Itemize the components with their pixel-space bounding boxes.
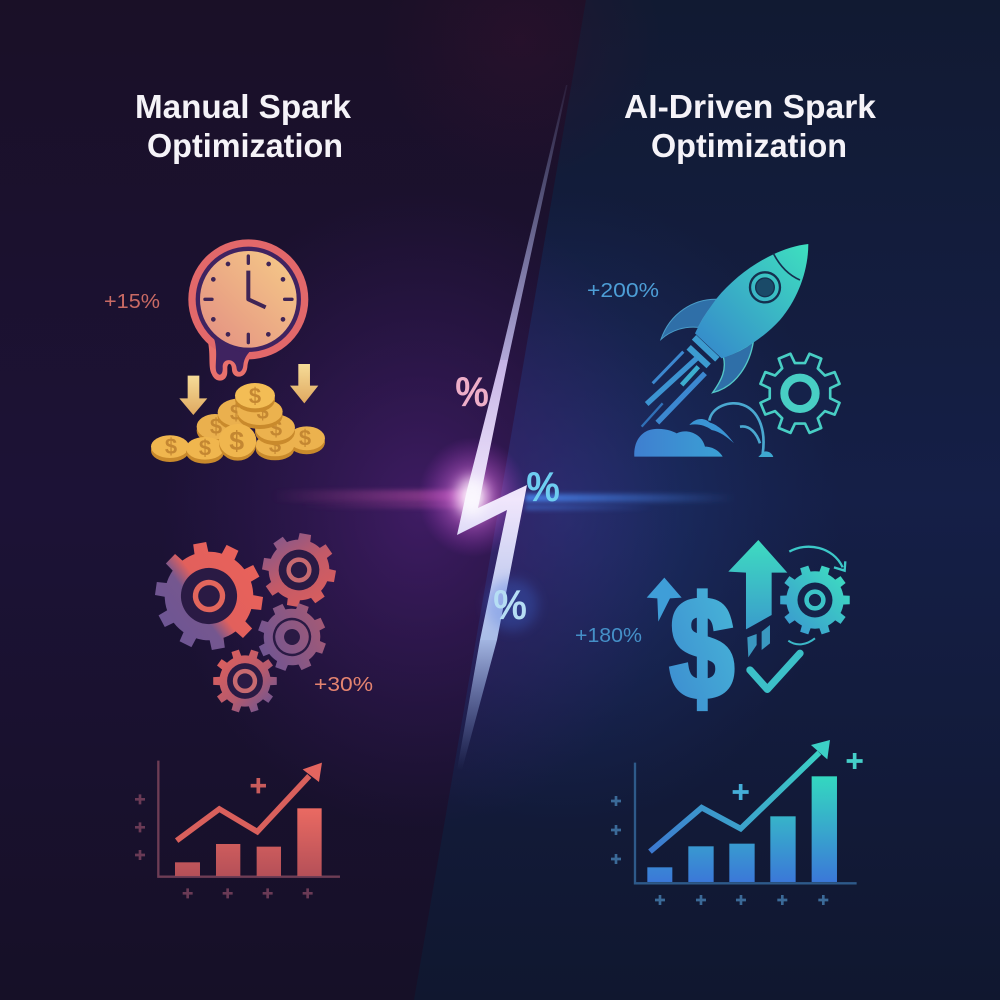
coin pile: $ [269, 433, 281, 458]
bars [175, 808, 322, 876]
cloud solid [634, 429, 723, 457]
right fin [713, 342, 753, 393]
clock ticks [205, 256, 292, 343]
coin pile: $ [165, 434, 177, 459]
coin pile: $ [249, 383, 261, 408]
cloud foot [758, 451, 773, 457]
coin pile: $ [257, 399, 269, 424]
dollar sign: $ [670, 569, 734, 728]
stat: +180%: +180% [575, 625, 642, 647]
stat: +30%: +30% [314, 674, 373, 696]
large arrow [728, 540, 787, 629]
icon: melting clock and coins [151, 239, 325, 464]
nose line [773, 253, 800, 280]
stat: +15%: +15% [104, 291, 160, 313]
gear [780, 566, 850, 634]
chart: AI-driven [611, 740, 863, 905]
plus mark center [733, 784, 749, 800]
axis plus marks [611, 796, 828, 905]
gear top right [257, 528, 341, 612]
background: manual side [0, 0, 680, 1000]
bars [647, 776, 837, 882]
clock ring [188, 239, 308, 359]
coin pile: $ [199, 436, 211, 461]
axes [158, 761, 340, 877]
clock hands [248, 271, 266, 307]
percent sign: middle: % [526, 464, 560, 510]
coin pile: $ [299, 426, 311, 451]
plus mark [251, 778, 266, 793]
icon: rusty gears [149, 528, 341, 712]
trend line [650, 753, 819, 852]
window [750, 272, 780, 302]
stat: +200%: +200% [587, 280, 659, 302]
coin pile [151, 383, 325, 464]
arrow: right down [290, 364, 318, 403]
arrow fragments [747, 625, 770, 657]
check mark [750, 653, 800, 689]
clock face [200, 251, 297, 348]
trend line [177, 776, 309, 841]
exhaust streaks [642, 352, 705, 427]
plus mark right [847, 753, 863, 769]
arrow: left down [179, 376, 207, 415]
trend arrowhead [811, 740, 830, 759]
background: AI side centre glow [280, 190, 840, 830]
rocket body [695, 244, 808, 358]
central lightning divider [270, 85, 735, 770]
heading: AI-driven line two: Optimization [651, 127, 847, 164]
clock bezel [196, 247, 301, 352]
chart: manual [135, 761, 340, 898]
axis plus marks [135, 794, 313, 898]
coin pile: $ [210, 414, 222, 439]
coin pile: $ [229, 426, 244, 456]
cloud small [689, 419, 734, 443]
heading: manual: Manual Spark [135, 88, 352, 125]
percent sign: top: % [455, 369, 489, 415]
clock drip [207, 337, 258, 381]
cloud outline [709, 403, 764, 454]
clock drip interior [214, 338, 254, 375]
window pane [756, 278, 774, 297]
gear middle right [248, 593, 336, 681]
heading: manual line two: Optimization [147, 127, 343, 164]
percent sign: bottom: % [493, 582, 527, 628]
nozzle rings [689, 337, 717, 366]
axes [635, 763, 857, 883]
rotation arc bottom [788, 638, 815, 644]
gear large [149, 536, 269, 656]
rotation arrow top [789, 547, 843, 567]
rotation arrowhead [834, 561, 845, 571]
coin pile: $ [270, 416, 282, 441]
coin pile: $ [230, 400, 242, 425]
small arrow [647, 578, 682, 622]
heading: AI-driven: AI-Driven Spark [624, 88, 877, 125]
left fin [661, 299, 718, 339]
trend arrowhead [303, 763, 322, 782]
outline gear [747, 341, 852, 446]
gear bottom [213, 650, 277, 712]
icon: dollar, arrows, gear, check [647, 540, 850, 728]
icon: rocket and gear [634, 244, 852, 457]
